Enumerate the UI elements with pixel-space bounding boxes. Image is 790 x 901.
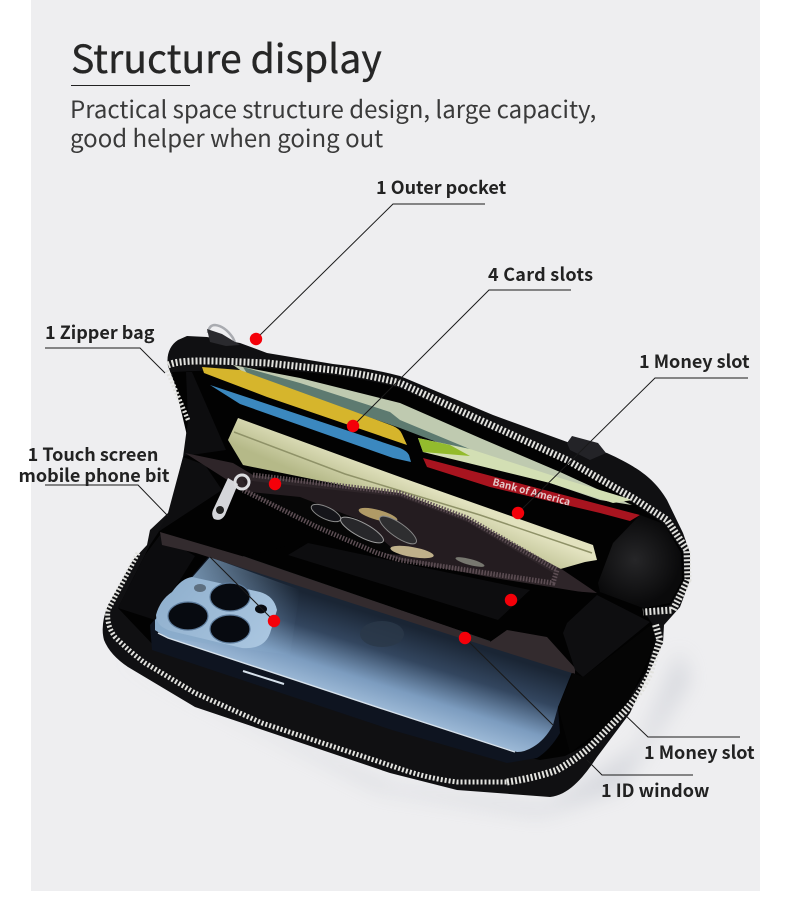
phone edge highlight: [158, 633, 515, 752]
right gusset bottom: [558, 624, 655, 753]
leader: lower money slot: [623, 713, 740, 737]
label: outer pocket: 1 Outer pocket: [376, 174, 507, 200]
leader: upper money slot: [518, 378, 748, 513]
side button: [243, 671, 284, 684]
back money slot bills: [233, 365, 632, 505]
apple logo: [360, 621, 404, 647]
leader: card slots: [353, 290, 571, 426]
id window edge: [243, 557, 490, 642]
label: touch screen phone: mobile phone bit: [18, 462, 170, 488]
red card: [423, 458, 640, 521]
brown strip above phone: [160, 532, 575, 674]
hotspot dots: [250, 333, 524, 644]
left wall: [184, 372, 226, 456]
cards: Bank of America: [491, 473, 572, 509]
cash: [228, 418, 597, 570]
right gusset lower: [563, 595, 650, 677]
label: upper money slot: 1 Money slot: [639, 348, 750, 374]
subtitle: Practical space structure design, large capacity,: [70, 90, 596, 125]
subtitle: good helper when going out: [70, 119, 383, 154]
camera lenses: [168, 583, 267, 643]
leader: touch screen: [45, 485, 274, 621]
side zipper tab: [567, 436, 606, 460]
title underline: [71, 85, 190, 86]
id window inner panel: [288, 543, 530, 620]
zip pocket flap: [185, 453, 597, 593]
label: card slots: 4 Card slots: [488, 261, 593, 287]
wallet interior: [118, 368, 684, 760]
id window: [243, 545, 600, 642]
label: touch screen phone: 1 Touch screen: [28, 441, 158, 467]
pocket zipper: [243, 475, 557, 583]
zipper tab top: [207, 329, 240, 346]
coin pocket interior: [243, 480, 555, 583]
blue card: [210, 385, 411, 462]
subtitle: [70, 90, 596, 154]
phone back: [155, 557, 572, 752]
label: zipper bag: 1 Zipper bag: [45, 319, 155, 345]
ring: [208, 325, 236, 345]
yellow card: [202, 367, 407, 445]
right gusset upper: [598, 515, 682, 608]
label: lower money slot: 1 Money slot: [644, 739, 755, 765]
label: id window: 1 ID window: [601, 777, 710, 803]
wallet illustration: [103, 325, 690, 815]
left lower gusset: [118, 535, 195, 620]
coins: [309, 501, 485, 569]
green card: [418, 438, 633, 503]
leader: id window: [465, 638, 693, 775]
title: Structure display: [71, 29, 382, 85]
wallet outer body: [103, 336, 690, 797]
camera block: [156, 577, 277, 648]
pocket zip pull: [212, 475, 249, 520]
cards: [202, 367, 640, 521]
zippers: [108, 361, 688, 782]
leader: outer pocket: [256, 204, 485, 339]
shadow: [110, 650, 690, 815]
leader: zipper bag: [45, 348, 165, 373]
phone frame: [150, 555, 572, 763]
